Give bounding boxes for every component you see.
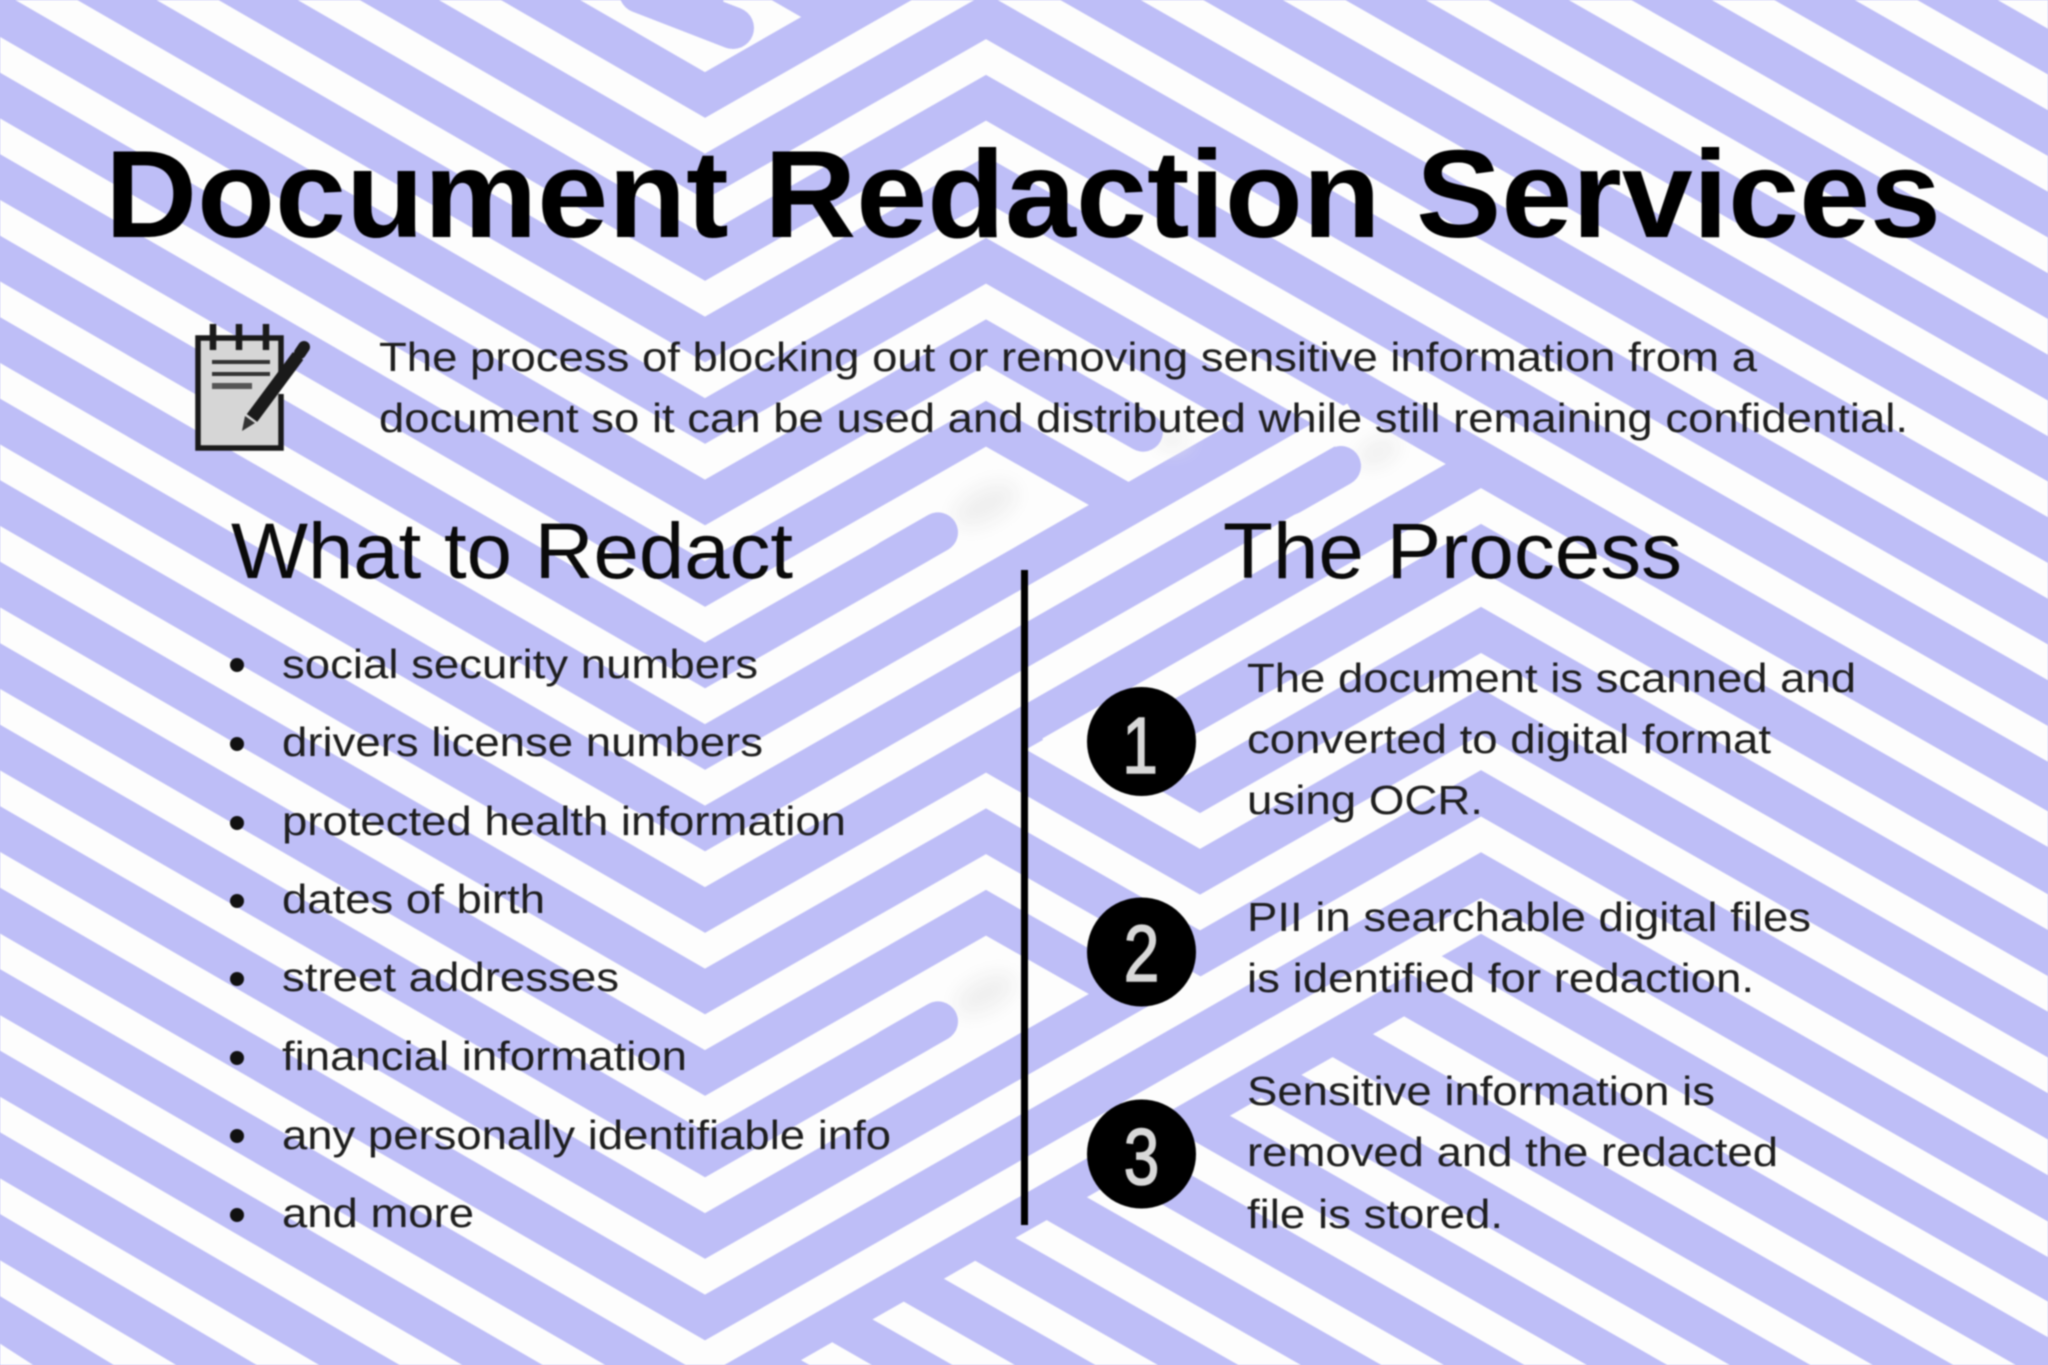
bulleted list: drivers license numbers [282,719,763,765]
intro text: document so it can be used and distributed while still remaining confidential. [379,395,1908,441]
step 3: 3 [1124,1112,1159,1202]
heading: what to redact: What to Redact [231,506,793,595]
step 3: Sensitive information is [1247,1068,1715,1114]
step 1: using OCR. [1247,777,1483,823]
intro text: The process of blocking out or removing sensitive information from a [379,334,1757,380]
intro text [379,334,1908,441]
bulleted list: financial information [282,1033,687,1079]
step 2 [1087,894,1811,1006]
step 2: is identified for redaction. [1247,955,1754,1001]
bulleted list: protected health information [282,798,846,844]
step 1: converted to digital format [1247,716,1772,762]
bulleted list: any personally identifiable info [282,1112,891,1158]
bulleted list: and more [282,1190,474,1236]
panel: the process [1087,506,1856,1237]
heading: the process: The Process [1223,506,1682,595]
step 3: file is stored. [1247,1191,1503,1237]
icon: notepad and pencil [198,324,304,448]
bulleted list: street addresses [282,954,619,1000]
panel: what to redact [230,506,891,1236]
bulleted list: dates of birth [282,876,545,922]
title: Document Redaction Services [105,126,1941,264]
bulleted list [230,641,891,1236]
step 3 [1087,1068,1778,1237]
step 2: PII in searchable digital files [1247,894,1811,940]
step 1: The document is scanned and [1247,655,1856,701]
step 1: 1 [1122,701,1158,791]
bulleted list: social security numbers [282,641,758,687]
step 1 [1087,655,1856,823]
step 3: removed and the redacted [1247,1129,1778,1175]
vertical divider [1021,570,1028,1225]
step 2: 2 [1124,909,1159,999]
